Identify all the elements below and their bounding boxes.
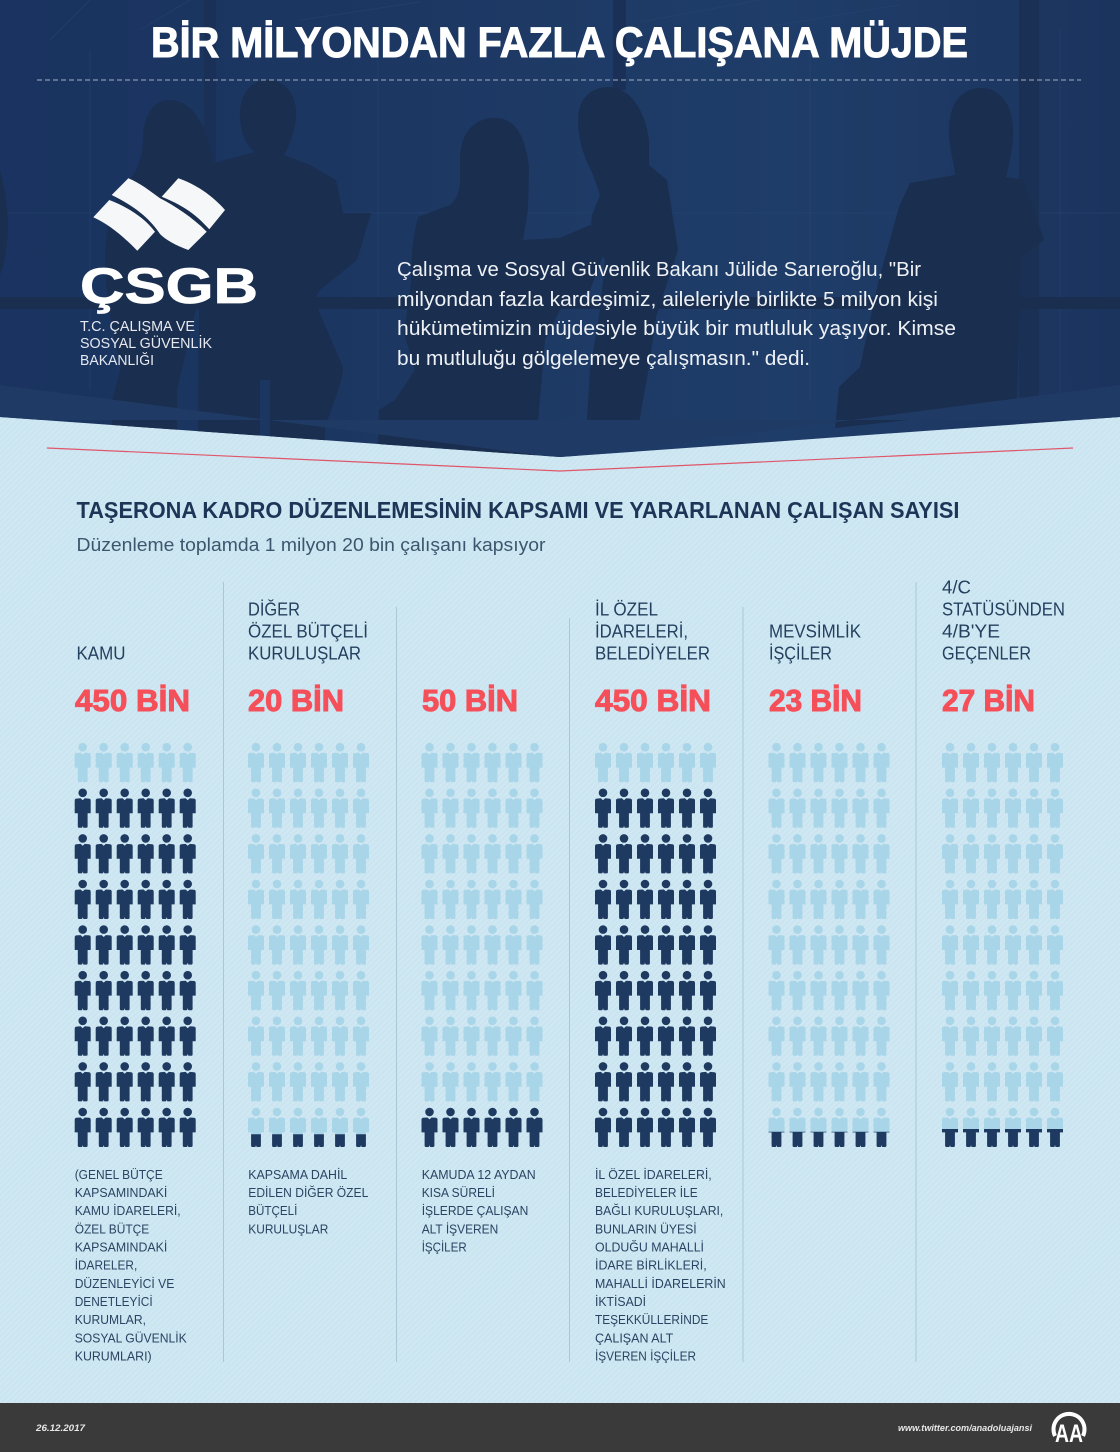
ministry name: SOSYAL GÜVENLİK: [80, 334, 212, 352]
number: 50 BİN: [422, 683, 518, 718]
description: DÜZENLEYİCİ VE: [75, 1276, 175, 1291]
label: [769, 622, 861, 664]
number: 20 BİN: [248, 683, 344, 718]
date: 26.12.2017: [35, 1423, 86, 1433]
description: KAMU İDARELERİ,: [75, 1203, 181, 1218]
silhouettes of people: [0, 80, 1044, 458]
panel: İL ÖZEL İDARELERİ, BELEDİYELER: [595, 600, 726, 1364]
number: 23 BİN: [769, 683, 862, 718]
ministry name: T.C. ÇALIŞMA VE: [80, 318, 195, 335]
label: DİĞER: [248, 598, 300, 620]
footer bar: [0, 1403, 1120, 1452]
subheading: Düzenleme toplamda 1 milyon 20 bin çalışanı kapsıyor: [76, 535, 546, 555]
description: [595, 1167, 726, 1364]
panel: header photo with silhouettes: [0, 0, 1120, 460]
pictogram: [422, 743, 542, 1147]
description: EDİLEN DİĞER ÖZEL: [248, 1185, 368, 1200]
label: İDARELERİ,: [595, 622, 688, 642]
logo: CSGB ministry: [80, 178, 258, 369]
panel: MEVSİMLİK İŞÇİLER: [768, 622, 890, 1147]
description: KISA SÜRELİ: [422, 1185, 495, 1200]
pictogram: [248, 743, 369, 1147]
label: 4/B'YE: [942, 622, 1000, 642]
description: İŞVEREN İŞÇİLER: [595, 1348, 696, 1364]
label: [942, 578, 1065, 664]
text block: minister quote: [397, 259, 956, 370]
number: 450 BİN: [595, 683, 711, 718]
description: ALT İŞVEREN: [422, 1221, 498, 1236]
description: İL ÖZEL İDARELERİ,: [595, 1167, 712, 1182]
label: [248, 598, 368, 664]
description: TEŞEKKÜLLERİNDE: [595, 1312, 709, 1327]
label: 4/C: [942, 578, 971, 598]
number: 27 BİN: [942, 683, 1035, 718]
description: KAPSAMINDAKİ: [75, 1185, 167, 1200]
text block: minister quote: bu mutluluğu gölgelemeye çalışmasın." dedi.: [397, 348, 810, 370]
description: [75, 1167, 187, 1364]
label: [595, 600, 710, 664]
description: [422, 1167, 536, 1254]
description: OLDUĞU MAHALLİ: [595, 1240, 704, 1254]
icon: Anadolu Agency logo: [1053, 1414, 1084, 1448]
description: İŞLERDE ÇALIŞAN: [422, 1203, 528, 1218]
description: [248, 1167, 368, 1236]
description: BAĞLI KURULUŞLARI,: [595, 1203, 723, 1218]
description: İKTİSADİ: [595, 1294, 646, 1309]
pictogram: [595, 743, 716, 1147]
text block: minister quote: hükümetimizin müjdesiyle büyük bir mutluluk yaşıyor. Kimse: [397, 318, 956, 340]
heading: scope of regulation: TAŞERONA KADRO DÜZENLEMESİNİN KAPSAMI VE YARARLANAN ÇALIŞAN SAYISI: [76, 497, 960, 523]
label: GEÇENLER: [942, 644, 1031, 664]
logo wordmark: ÇSGB: [80, 258, 258, 314]
description: ÇALIŞAN ALT: [595, 1330, 673, 1346]
description: KURUMLARI): [75, 1348, 152, 1364]
description: (GENEL BÜTÇE: [75, 1167, 163, 1182]
label: ÖZEL BÜTÇELİ: [248, 622, 368, 642]
icon: ministry emblem: [93, 178, 225, 251]
label: BELEDİYELER: [595, 644, 710, 664]
description: KAPSAMINDAKİ: [75, 1240, 167, 1254]
pictogram: [768, 743, 890, 1147]
label: STATÜSÜNDEN: [942, 600, 1065, 620]
description: BELEDİYELER İLE: [595, 1185, 698, 1200]
description: İDARELER,: [75, 1258, 137, 1273]
number: 450 BİN: [75, 683, 190, 718]
description: KAMUDA 12 AYDAN: [422, 1167, 536, 1182]
panel: KAMU: [75, 644, 196, 1364]
description: DENETLEYİCİ: [75, 1294, 153, 1309]
text block: minister quote: milyondan fazla kardeşimiz, aileleriyle birlikte 5 milyon kişi: [397, 289, 938, 311]
description: İDARE BİRLİKLERİ,: [595, 1258, 707, 1273]
description: MAHALLİ İDARELERİN: [595, 1276, 726, 1291]
panel: 4/C STATÜSÜNDEN 4/B'YE GEÇENLER: [942, 578, 1065, 1147]
panel: 50 BİN: [422, 683, 542, 1254]
twitter link text: www.twitter.com/anadoluajansi: [898, 1423, 1032, 1433]
description: SOSYAL GÜVENLİK: [75, 1330, 187, 1346]
title: BİR MİLYONDAN FAZLA ÇALIŞANA MÜJDE: [151, 19, 968, 67]
description: KURULUŞLAR: [248, 1221, 328, 1236]
ministry name: BAKANLIĞI: [80, 352, 154, 369]
description: KAPSAMA DAHİL: [248, 1167, 347, 1182]
description: BUNLARIN ÜYESİ: [595, 1221, 697, 1236]
panel: DİĞER ÖZEL BÜTÇELİ KURULUŞLAR: [248, 598, 369, 1236]
pictogram: [75, 743, 196, 1147]
description: İŞÇİLER: [422, 1240, 467, 1254]
description: BÜTÇELİ: [248, 1203, 297, 1218]
label: KURULUŞLAR: [248, 644, 361, 664]
label: İL ÖZEL: [595, 600, 658, 620]
pictogram: [942, 743, 1063, 1147]
description: KURUMLAR,: [75, 1312, 146, 1327]
label: İŞÇİLER: [769, 644, 832, 664]
ministry name: [80, 318, 212, 369]
red chevron line: [47, 448, 1073, 471]
icon: Anadolu Agency logo: AA: [1055, 1420, 1083, 1448]
floor band: [0, 396, 1120, 457]
label: KAMU: [76, 644, 126, 664]
label: MEVSİMLİK: [769, 622, 861, 642]
text block: minister quote: Çalışma ve Sosyal Güvenlik Bakanı Jülide Sarıeroğlu, "Bir: [397, 259, 921, 281]
description: ÖZEL BÜTÇE: [75, 1221, 150, 1236]
